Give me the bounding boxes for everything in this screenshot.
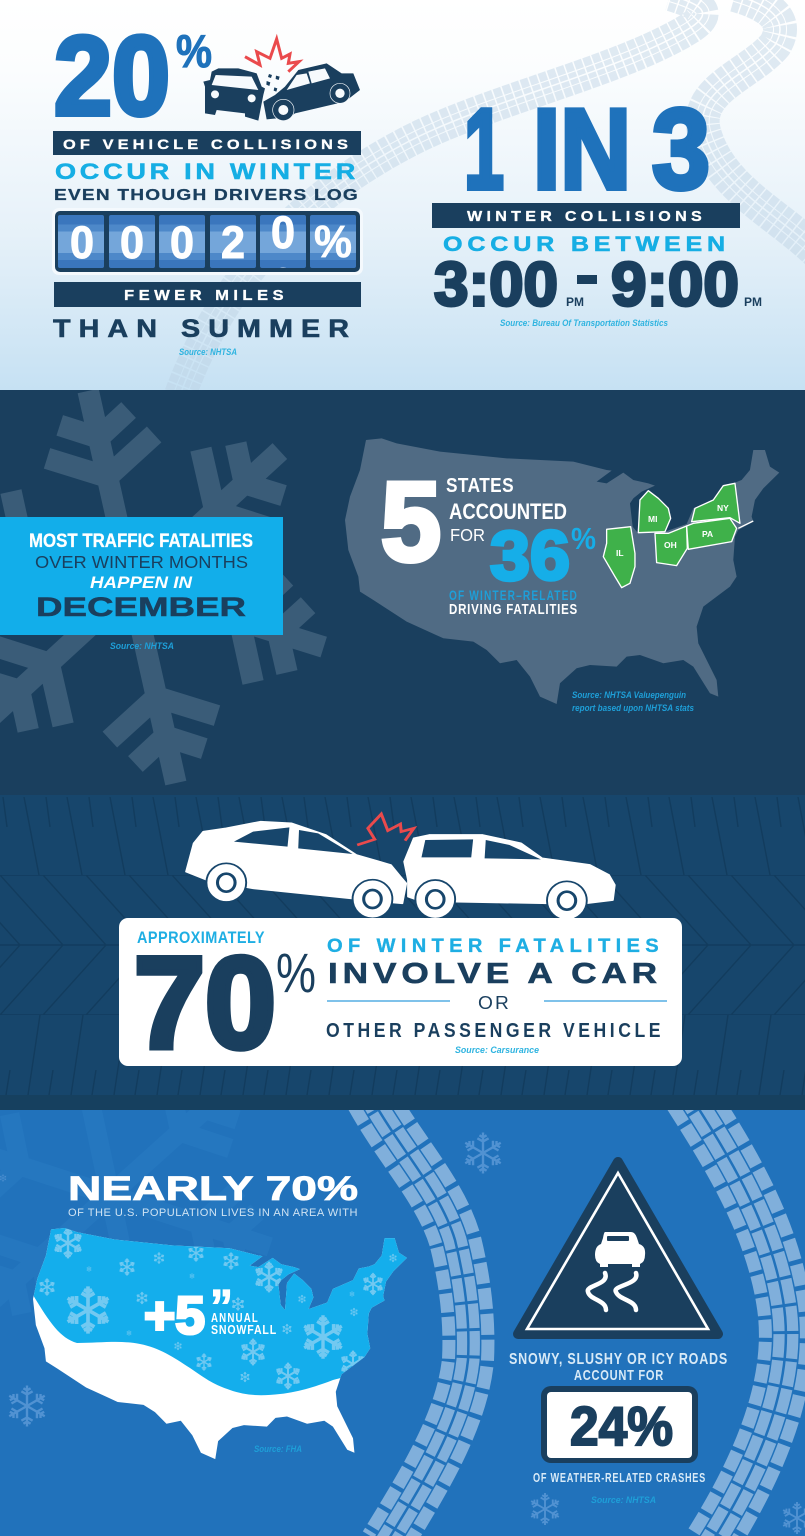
stat: 5 states 36 percent: 5 <box>381 460 441 584</box>
faint background snowflake <box>0 996 310 1394</box>
stat: 1 in 3: IN <box>533 86 631 214</box>
callout: december <box>0 517 283 635</box>
callout box: 24 percent: 24% <box>570 1395 673 1457</box>
source: NHTSA: Source: NHTSA <box>110 641 174 652</box>
text: snowy slushy or icy roads: ACCOUNT FOR <box>574 1367 664 1384</box>
callout card: 70 percent: INVOLVE A CAR <box>328 958 662 990</box>
callout card: 70 percent <box>119 918 682 1076</box>
icon: white cars crash <box>186 814 615 920</box>
odometer 00020 percent: 0 <box>271 259 295 310</box>
highlighted states <box>603 483 753 588</box>
callout card: 70 percent: Source: Carsurance <box>455 1045 540 1056</box>
state labels: OH <box>664 540 677 550</box>
time range 3:00 to 9:00 pm <box>434 250 762 320</box>
callout: december: OVER WINTER MONTHS <box>35 552 248 572</box>
tire tracks background <box>174 0 805 370</box>
odometer 00020 percent: 2 <box>221 217 245 268</box>
stat: plus 5 inches annual snowfall: SNOWFALL <box>211 1322 277 1337</box>
text: than summer: THAN SUMMER <box>53 315 357 343</box>
callout: december: DECEMBER <box>36 592 246 622</box>
stat: 1 in 3: 1 <box>464 86 504 214</box>
tire tracks <box>348 1110 805 1536</box>
map snowflakes <box>38 1228 397 1389</box>
subheading: population: OF THE U.S. POPULATION LIVES IN AN AREA WITH <box>68 1207 358 1219</box>
source: valuepenguin <box>572 690 694 714</box>
callout: december: MOST TRAFFIC FATALITIES <box>29 531 253 552</box>
text: snowy slushy or icy roads: SNOWY, SLUSHY OR ICY ROADS <box>509 1351 728 1368</box>
state labels: IL <box>616 548 624 558</box>
bar: fewer miles: FEWER MILES <box>124 287 288 304</box>
stat: 1 in 3 <box>464 86 710 214</box>
stat: 5 states 36 percent: DRIVING FATALITIES <box>449 601 578 618</box>
stat: 5 states 36 percent: FOR <box>450 525 485 545</box>
stat: 5 states 36 percent: ACCOUNTED <box>449 499 567 524</box>
loose snowflakes <box>0 1132 805 1534</box>
bar: of vehicle collisions <box>53 131 361 155</box>
time range 3:00 to 9:00 pm: 9:00 <box>611 250 739 320</box>
callout card: 70 percent: OTHER PASSENGER VEHICLE <box>326 1020 664 1042</box>
odometer 00020 percent: 0 <box>70 217 94 268</box>
bar: of vehicle collisions: OF VEHICLE COLLISIONS <box>63 136 352 152</box>
odometer 00020 percent: % <box>314 216 352 267</box>
stat: 20 percent: % <box>176 25 212 77</box>
stat: 1 in 3: 3 <box>652 86 710 213</box>
state labels: MI <box>648 514 657 524</box>
odometer 00020 percent: 0 <box>170 217 194 268</box>
large snowflake <box>0 390 327 786</box>
map: snowfall region <box>33 1228 407 1460</box>
odometer 00020 percent: 0 <box>271 207 295 258</box>
stat: 5 states 36 percent: 36 <box>490 516 570 594</box>
callout card: 70 percent: 70 <box>134 930 276 1076</box>
source: NHTSA: Source: NHTSA <box>179 347 237 358</box>
bar: winter collisions: WINTER COLLISIONS <box>467 208 706 225</box>
text: occur between: OCCUR BETWEEN <box>443 233 730 256</box>
source: bureau of transportation statistics: Source: Bureau Of Transportation Statistics <box>500 318 668 329</box>
time range 3:00 to 9:00 pm: PM <box>744 295 762 309</box>
snow region <box>34 1228 407 1396</box>
stat: 5 states 36 percent: % <box>571 521 596 556</box>
state labels <box>616 503 729 558</box>
callout card: 70 percent: APPROXIMATELY <box>137 929 265 947</box>
icon: slippery road warning sign <box>518 1162 718 1334</box>
source: valuepenguin: report based upon NHTSA stats <box>572 703 694 714</box>
source: FHA: Source: FHA <box>254 1444 302 1455</box>
text: even though drivers log: EVEN THOUGH DRIVERS LOG <box>54 187 359 204</box>
map: united states with highlighted states <box>345 438 779 704</box>
callout card: 70 percent: % <box>276 941 316 1004</box>
tire tread texture <box>0 797 805 1110</box>
callout card: 70 percent: OR <box>478 993 511 1013</box>
callout: december: HAPPEN IN <box>90 573 193 592</box>
panel: states and december section <box>0 390 805 795</box>
heading: nearly 70 percent: NEARLY 70% <box>68 1170 358 1208</box>
callout card: 70 percent: OF WINTER FATALITIES <box>327 936 664 957</box>
text: snowy slushy or icy roads <box>509 1351 728 1384</box>
stat: plus 5 inches annual snowfall: ANNUAL <box>211 1311 259 1325</box>
stat: 5 states 36 percent: STATES <box>446 474 514 497</box>
time range 3:00 to 9:00 pm: 3:00 <box>434 250 558 320</box>
stat: 20 percent: 20 <box>54 14 170 138</box>
state labels: PA <box>702 529 713 539</box>
icon: crashed cars <box>203 39 360 121</box>
state labels: NY <box>717 503 729 513</box>
stat: 5 states 36 percent: OF WINTER–RELATED <box>449 588 578 603</box>
bar: winter collisions <box>432 203 740 228</box>
odometer 00020 percent <box>52 208 363 275</box>
source: valuepenguin: Source: NHTSA Valuepenguin <box>572 690 686 701</box>
stat: plus 5 inches annual snowfall: +5 <box>144 1286 205 1346</box>
stat: 5 states 36 percent <box>381 460 596 618</box>
stat: plus 5 inches annual snowfall: ” <box>210 1281 233 1334</box>
panel: snowfall and road conditions section <box>0 1110 805 1536</box>
text: of weather-related crashes: OF WEATHER-RELATED CRASHES <box>533 1471 706 1485</box>
text: occur in winter: OCCUR IN WINTER <box>55 159 359 184</box>
panel: top collisions section <box>0 0 805 390</box>
stat: plus 5 inches annual snowfall <box>144 1281 277 1346</box>
source: NHTSA: Source: NHTSA <box>591 1495 656 1506</box>
time range 3:00 to 9:00 pm: PM <box>566 295 584 309</box>
odometer 00020 percent: 0 <box>120 217 144 268</box>
bar: fewer miles <box>54 282 361 307</box>
panel: passenger vehicle section <box>0 795 805 1110</box>
callout box: 24 percent <box>541 1386 698 1463</box>
